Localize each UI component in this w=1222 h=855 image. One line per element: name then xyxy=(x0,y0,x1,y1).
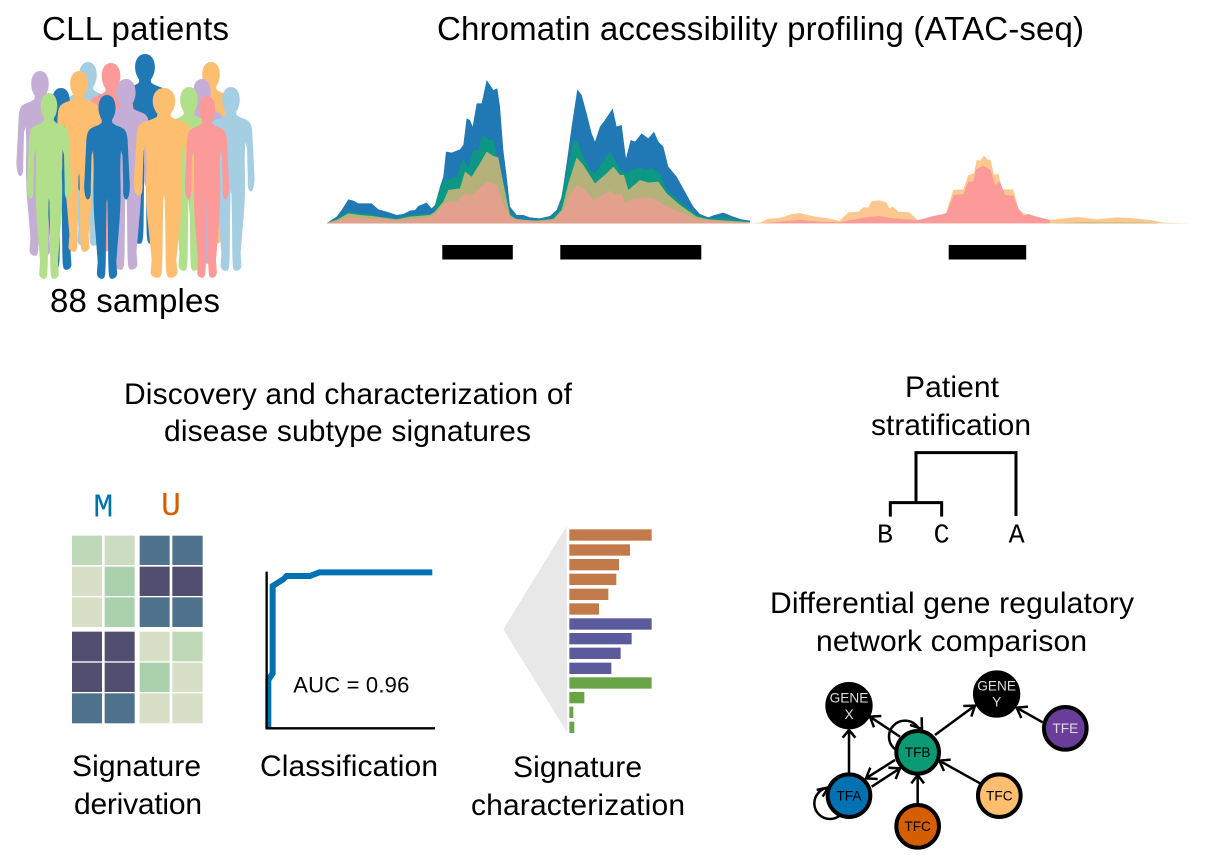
heading: discovery and characterization: disease subtype signatures xyxy=(164,415,531,448)
dendrogram: C xyxy=(934,522,950,552)
heatmap: signature derivation: U xyxy=(161,488,181,526)
label: signature characterization: characterization xyxy=(471,789,685,822)
diagram: gene regulatory network: TFC xyxy=(904,819,931,834)
diagram: gene regulatory network: Y xyxy=(992,695,1001,710)
chart: ROC curve xyxy=(267,572,435,728)
diagram: gene regulatory network: GENE xyxy=(977,679,1016,694)
label: signature characterization: Signature xyxy=(513,751,642,784)
heading: differential gene regulatory network comparison: network comparison xyxy=(816,625,1087,658)
heading: differential gene regulatory network comparison: Differential gene regulatory xyxy=(770,587,1134,620)
heading: patient stratification: Patient xyxy=(905,371,1000,404)
diagram: gene regulatory network: X xyxy=(844,707,854,722)
heatmap: signature derivation xyxy=(72,488,203,723)
heading: patient stratification: stratification xyxy=(871,409,1031,442)
dendrogram: B xyxy=(877,522,893,552)
dendrogram xyxy=(877,453,1025,552)
label: 88 samples: 88 samples xyxy=(50,282,220,319)
diagram: gene regulatory network xyxy=(814,672,1087,848)
label: signature derivation xyxy=(72,750,202,821)
chart: ROC curve: AUC = 0.96 xyxy=(293,673,409,698)
label: signature characterization xyxy=(471,751,685,822)
chart: ATAC-seq accessibility tracks, right region xyxy=(750,156,1192,223)
label: classification: Classification xyxy=(260,750,438,783)
chart: ATAC-seq accessibility tracks, left region xyxy=(327,80,750,223)
heading: differential gene regulatory network comparison xyxy=(770,587,1134,658)
diagram: gene regulatory network: TFB xyxy=(905,745,931,760)
diagram: gene regulatory network: TFE xyxy=(1052,721,1078,736)
diagram: gene regulatory network: TFA xyxy=(836,788,862,803)
icon: crowd of patient silhouettes xyxy=(16,54,255,279)
title: CLL patients: CLL patients xyxy=(42,10,229,47)
label: signature derivation: Signature xyxy=(72,750,201,783)
heatmap: signature derivation: M xyxy=(93,490,113,528)
title: chromatin accessibility profiling: Chromatin accessibility profiling (ATAC-seq) xyxy=(437,10,1084,47)
label: signature derivation: derivation xyxy=(74,788,202,821)
heading: discovery and characterization xyxy=(124,378,573,448)
diagram: gene regulatory network: GENE xyxy=(830,691,868,706)
chart: signature characterization bars xyxy=(503,526,652,733)
diagram: gene regulatory network: TFC xyxy=(986,788,1013,803)
peak region bars xyxy=(442,245,1026,260)
heading: patient stratification xyxy=(871,371,1031,442)
dendrogram: A xyxy=(1009,522,1025,552)
heading: discovery and characterization: Discovery and characterization of xyxy=(124,378,573,411)
